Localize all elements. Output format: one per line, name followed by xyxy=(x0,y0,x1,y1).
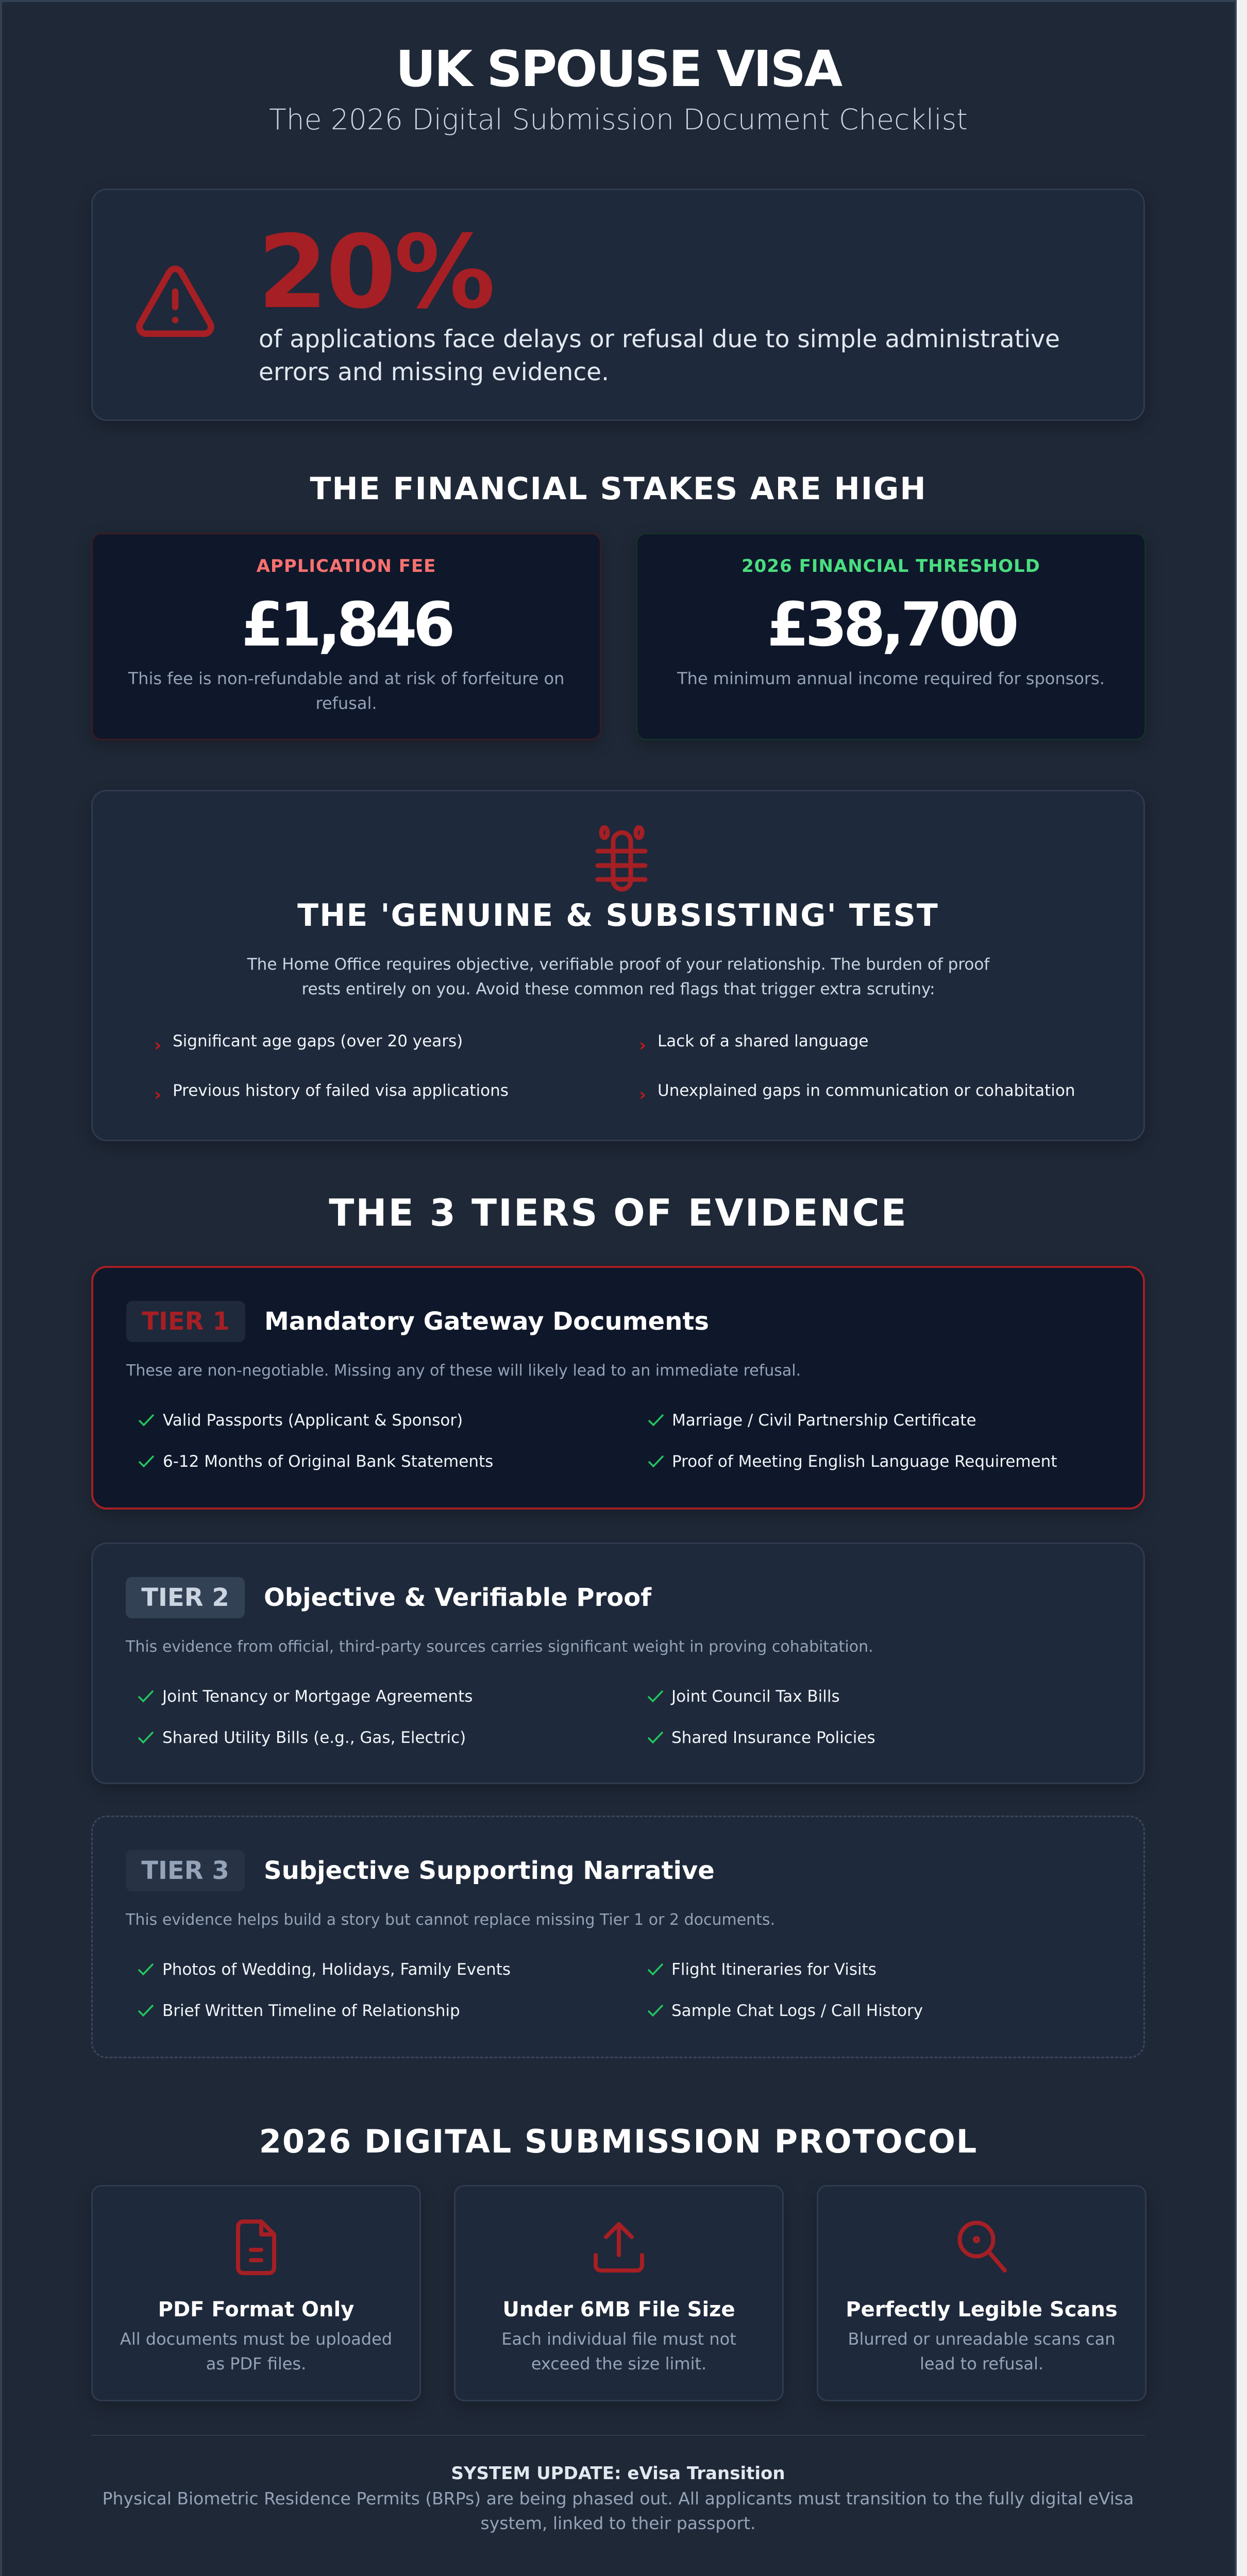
system update note: SYSTEM UPDATE: eVisa Transition xyxy=(451,2463,785,2484)
icon: red ladder/flag glyph xyxy=(596,825,647,891)
icon: document xyxy=(236,2219,276,2275)
heading: financial stakes: THE FINANCIAL STAKES ARE HIGH xyxy=(310,471,927,507)
card: financial threshold xyxy=(636,533,1146,740)
red flags list: › xyxy=(639,1084,646,1105)
tier title: Mandatory Gateway Documents xyxy=(264,1307,709,1336)
value: £1,846 xyxy=(241,589,451,660)
red flags list xyxy=(154,1032,1075,1105)
card: application fee xyxy=(91,533,601,740)
red flags list: Lack of a shared language xyxy=(658,1032,869,1050)
panel: tier 3 xyxy=(91,1816,1145,2058)
panel: genuine & subsisting test xyxy=(91,790,1145,1141)
description: The minimum annual income required for sponsors. xyxy=(677,669,1105,688)
panel: genuine & subsisting test: › xyxy=(154,1084,161,1105)
icon: magnifier xyxy=(957,2221,1007,2273)
subtitle: The 2026 Digital Submission Document Checklist xyxy=(269,103,968,136)
title: UK SPOUSE VISA xyxy=(396,40,841,98)
tier description: This evidence from official, third-party sources carries significant weight in proving cohabitation. xyxy=(126,1638,873,1656)
tier description: This evidence helps build a story but cannot replace missing Tier 1 or 2 documents. xyxy=(126,1911,775,1929)
checklist: Sample Chat Logs / Call History xyxy=(671,2002,923,2020)
red flags list: Previous history of failed visa applications xyxy=(173,1081,509,1100)
checklist: Photos of Wedding, Holidays, Family Events xyxy=(162,1960,511,1979)
badge: tier 1 xyxy=(126,1301,245,1342)
checklist: Proof of Meeting English Language Requirement xyxy=(672,1452,1057,1471)
label: APPLICATION FEE xyxy=(257,556,436,577)
icon: warning triangle xyxy=(136,266,214,337)
checklist: Valid Passports (Applicant & Sponsor) xyxy=(163,1411,463,1430)
card description: All documents must be uploaded as PDF files. xyxy=(120,2329,392,2374)
heading: digital submission protocol: 2026 DIGITAL SUBMISSION PROTOCOL xyxy=(259,2123,978,2160)
badge: tier 3 xyxy=(126,1850,245,1891)
checklist: Shared Insurance Policies xyxy=(671,1728,875,1747)
badge: tier 1: TIER 1 xyxy=(142,1307,230,1336)
system update note: Physical Biometric Residence Permits (BRPs) are being phased out. All applicants must transition to the fully digital eVisa system, linked to their passport. xyxy=(103,2488,1134,2533)
stat: 20%: 20% xyxy=(258,214,493,331)
checklist xyxy=(138,1960,923,2020)
checklist xyxy=(139,1411,1057,1471)
checklist: Brief Written Timeline of Relationship xyxy=(162,2002,460,2020)
icon: upload xyxy=(594,2222,644,2273)
red flags list: Significant age gaps (over 20 years) xyxy=(173,1032,463,1050)
badge: tier 3: TIER 3 xyxy=(141,1856,229,1885)
value: £38,700 xyxy=(767,589,1015,660)
card: file size xyxy=(454,2185,784,2401)
panel: tier 1 xyxy=(91,1266,1145,1510)
badge: tier 2 xyxy=(126,1577,245,1618)
checklist xyxy=(138,1687,875,1747)
checklist: Flight Itineraries for Visits xyxy=(671,1960,877,1979)
card description: Blurred or unreadable scans can lead to refusal. xyxy=(848,2329,1116,2374)
stat text: of applications face delays or refusal due to simple administrative errors and missing evidence. xyxy=(259,325,1060,386)
paragraph: The Home Office requires objective, verifiable proof of your relationship. The burden of proof rests entirely on you. Avoid these common red flags that trigger extra scrutiny: xyxy=(247,955,989,998)
heading: THE 'GENUINE & SUBSISTING' TEST xyxy=(297,897,939,934)
card title: Perfectly Legible Scans xyxy=(846,2298,1118,2321)
checklist: Marriage / Civil Partnership Certificate xyxy=(672,1411,976,1430)
tier title: Subjective Supporting Narrative xyxy=(264,1856,715,1885)
panel: tier 2 xyxy=(91,1543,1145,1784)
checklist: 6-12 Months of Original Bank Statements xyxy=(163,1452,493,1471)
checklist: Joint Tenancy or Mortgage Agreements xyxy=(162,1687,473,1706)
card: PDF format xyxy=(91,2185,421,2401)
system update note xyxy=(103,2463,1134,2533)
red flags list: › xyxy=(639,1035,646,1056)
tier description: These are non-negotiable. Missing any of these will likely lead to an immediate refusal. xyxy=(126,1362,801,1380)
alert card: 20% xyxy=(91,189,1145,421)
heading: 3 tiers: THE 3 TIERS OF EVIDENCE xyxy=(329,1191,908,1234)
badge: tier 2: TIER 2 xyxy=(141,1583,229,1612)
card title: PDF Format Only xyxy=(158,2298,354,2321)
checklist: Joint Council Tax Bills xyxy=(671,1687,840,1706)
tier title: Objective & Verifiable Proof xyxy=(264,1583,651,1612)
card description: Each individual file must not exceed the size limit. xyxy=(501,2329,736,2374)
card: legible scans xyxy=(817,2185,1147,2401)
label: 2026 FINANCIAL THRESHOLD xyxy=(742,556,1040,577)
panel: genuine & subsisting test: › xyxy=(154,1035,161,1056)
description: This fee is non-refundable and at risk of forfeiture on refusal. xyxy=(128,669,564,713)
card title: Under 6MB File Size xyxy=(502,2298,735,2321)
red flags list: Unexplained gaps in communication or cohabitation xyxy=(658,1081,1075,1100)
checklist: Shared Utility Bills (e.g., Gas, Electric) xyxy=(162,1728,466,1747)
